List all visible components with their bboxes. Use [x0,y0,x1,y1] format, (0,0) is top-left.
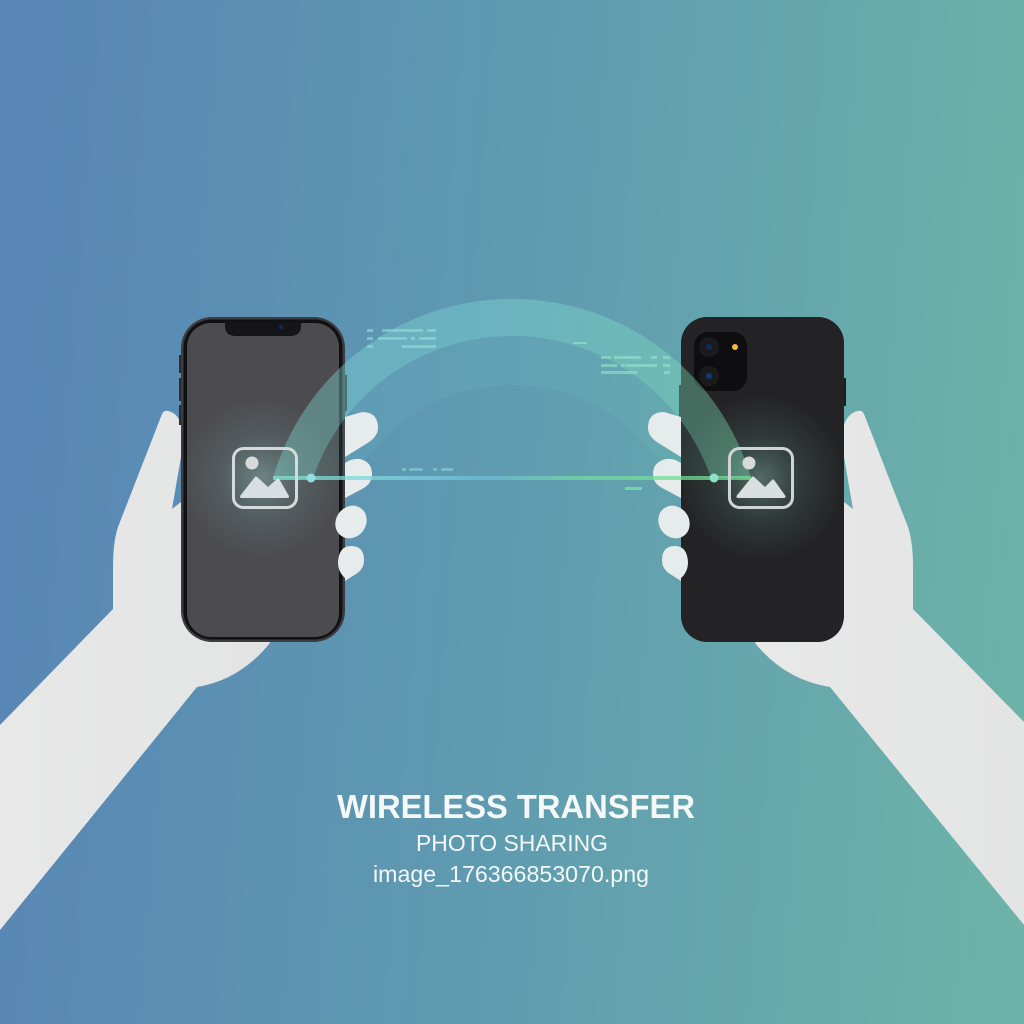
file name: image_176366853070.png [373,861,649,887]
right phone glow [677,394,845,562]
left phone notch [225,322,301,336]
left phone: front with screen [179,317,347,642]
lower data dashes [402,468,642,490]
icon: photo on left phone [234,448,296,508]
right hand and arm [755,411,1024,925]
left phone body [181,317,345,642]
left phone bezel [184,320,342,640]
outer arc band [273,299,751,478]
left phone screen [187,323,339,637]
camera module [694,332,747,391]
right node dot [710,474,718,482]
left hand and arm [0,411,270,930]
title: WIRELESS TRANSFER [337,788,695,825]
left phone side buttons [179,355,347,425]
right phone side buttons [679,378,846,417]
inner arc band [354,385,670,478]
icon: photo on right phone [730,448,792,508]
left fingers [329,412,378,581]
right phone: back with camera [679,317,846,642]
right phone body [681,317,844,642]
left phone camera [279,325,283,329]
transfer beam [273,476,751,480]
left screen glow [182,398,342,558]
subtitle: PHOTO SHARING [416,830,608,856]
right data dashes [573,342,670,374]
right fingers [648,412,696,581]
left data dashes [367,329,436,348]
transfer arc bands [273,299,751,478]
middle arc band [313,336,711,478]
left node dot [306,474,316,482]
